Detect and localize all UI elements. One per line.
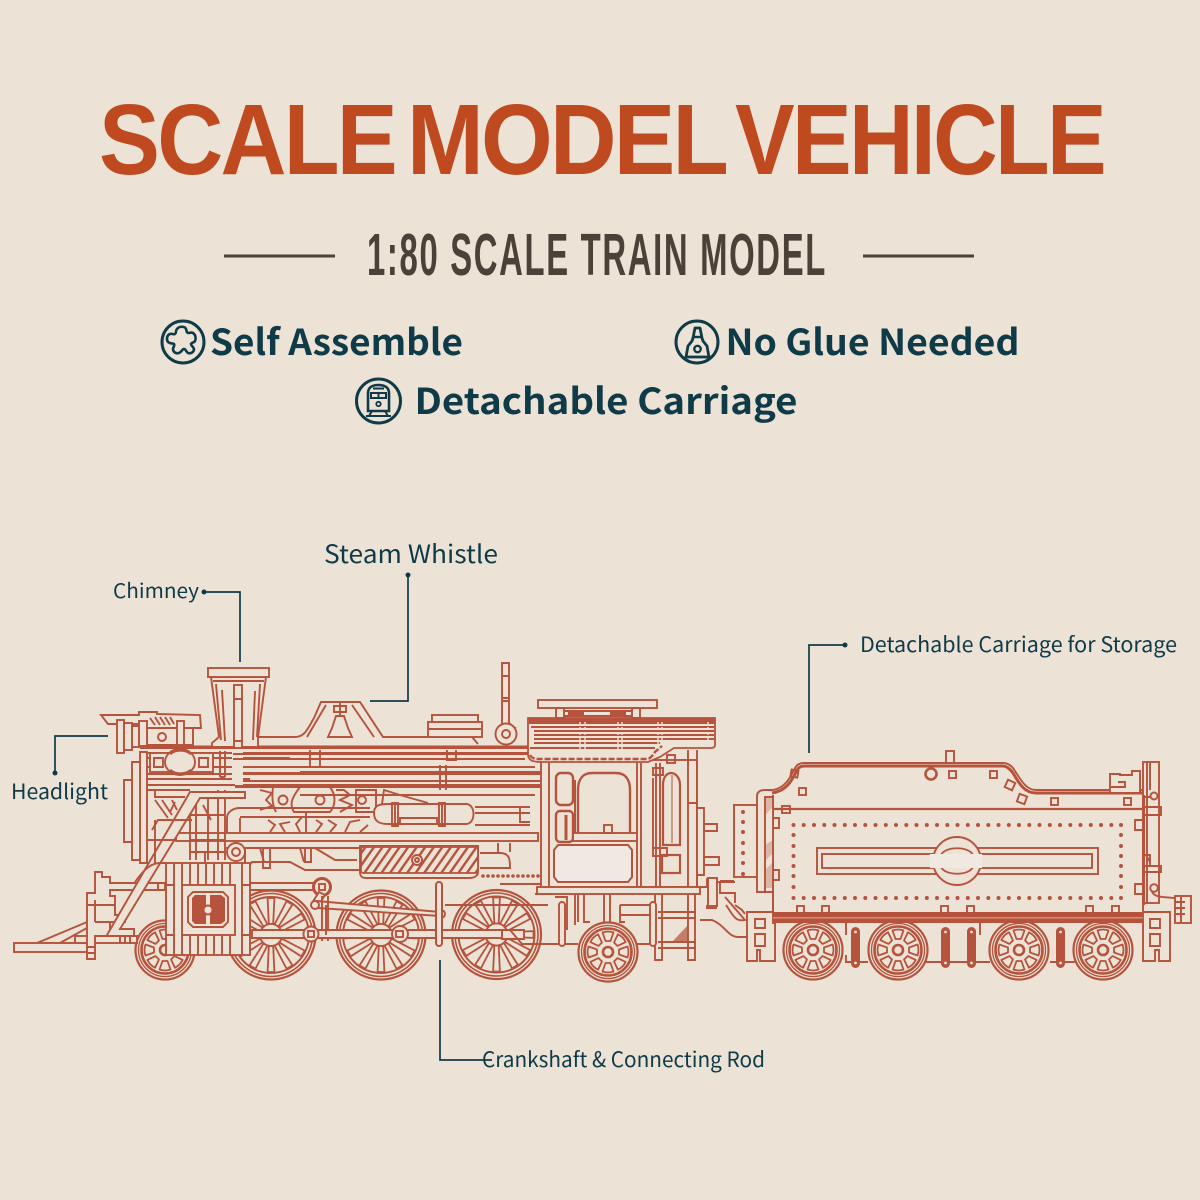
sand dome <box>428 715 482 744</box>
whistle lever <box>496 663 516 744</box>
smokebox front <box>124 749 235 863</box>
rear truck frame <box>510 894 696 960</box>
feature: detachable carriage: Detachable Carriage <box>414 373 798 425</box>
drawbar and coupler <box>697 878 755 937</box>
hatched firebox panel <box>361 847 478 873</box>
tender small squares <box>773 751 1143 913</box>
side rods <box>250 878 552 946</box>
title: SCALE <box>99 84 395 196</box>
feature: self assemble: Self Assemble <box>210 314 463 366</box>
tender <box>720 751 1191 980</box>
side window and fittings <box>652 755 680 873</box>
feature: no glue needed: No Glue Needed <box>726 314 1020 366</box>
tender rail <box>773 913 1143 923</box>
icon: train front <box>356 379 400 423</box>
cab footplate <box>537 887 700 894</box>
callout: crankshaft and connecting rod <box>440 960 765 1074</box>
callout: headlight: Headlight <box>11 776 108 806</box>
tender rivets <box>792 823 1123 900</box>
subtitle with rules <box>224 222 974 288</box>
title: VEHICLE <box>735 84 1104 196</box>
valve cylinder block <box>166 863 250 955</box>
tender tank body <box>757 762 1191 923</box>
callout: headlight <box>11 736 108 806</box>
train illustration <box>14 663 1191 982</box>
title <box>99 84 1104 196</box>
boiler <box>140 702 540 795</box>
tender name plate <box>817 837 1098 885</box>
chimney <box>208 668 269 748</box>
callout: chimney: Chimney <box>113 575 200 604</box>
callout: chimney <box>113 575 240 662</box>
tender undercarriage <box>747 912 1170 968</box>
front frame and strut <box>107 790 245 936</box>
under-boiler frame <box>226 843 510 878</box>
title: MODEL <box>407 84 727 196</box>
trailing wheel <box>578 922 638 982</box>
running board <box>176 833 538 841</box>
leading wheel <box>136 920 194 980</box>
tender back panel <box>720 805 757 914</box>
cab windows <box>556 773 637 842</box>
locomotive <box>14 663 755 982</box>
callout: detachable carriage for storage <box>809 629 1177 753</box>
gears and piping <box>227 787 530 832</box>
callout: steam whistle: Steam Whistle <box>324 535 498 571</box>
headlight <box>101 712 201 753</box>
pilot and coupler <box>14 872 165 959</box>
callout: detachable carriage for storage: Detachable Carriage for Storage <box>860 629 1177 659</box>
icon: puzzle piece <box>162 321 204 363</box>
subtitle with rules: 1:80 SCALE TRAIN MODEL <box>367 222 827 288</box>
driving wheels <box>226 890 541 980</box>
callout: crankshaft and connecting rod: Crankshaft & Connecting Rod <box>482 1044 765 1074</box>
callout: steam whistle <box>324 535 498 701</box>
icon: glue bottle <box>676 321 718 363</box>
tender wheels <box>784 920 1132 980</box>
cab plate <box>554 845 632 882</box>
cab roof <box>528 700 715 762</box>
cab <box>537 750 719 894</box>
rivet row <box>481 874 540 878</box>
